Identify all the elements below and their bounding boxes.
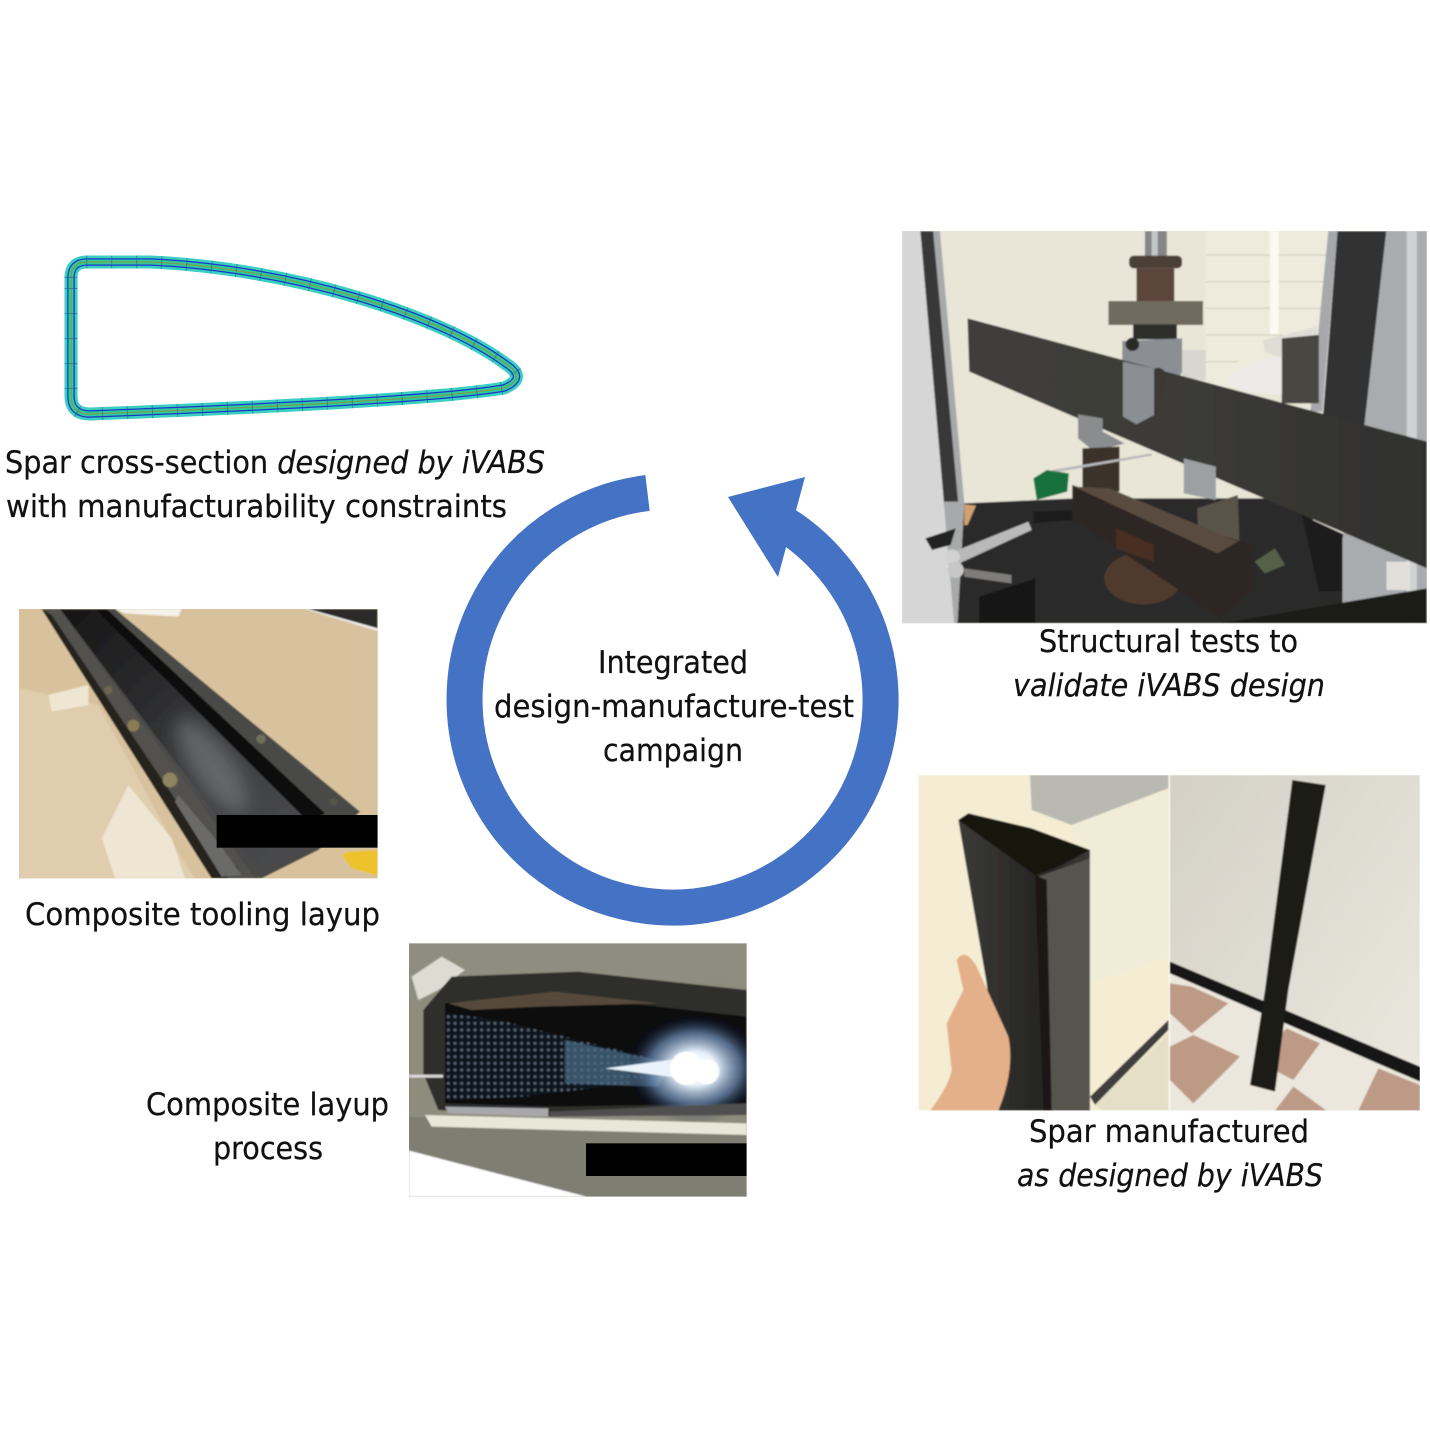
centre label: campaign: Integrated	[598, 645, 748, 681]
caption: structural tests: validate iVABS design	[1013, 668, 1325, 704]
caption: spar cross-section: Spar cross-section designed by iVABS	[5, 445, 545, 481]
caption: spar cross-section	[5, 445, 545, 525]
centre label: campaign: design-manufacture-test	[494, 689, 854, 725]
caption: composite layup process: Composite layup	[146, 1087, 389, 1123]
caption: spar manufactured: Spar manufactured	[1029, 1114, 1309, 1150]
panel: spar cross-section diagram	[71, 262, 517, 414]
centre label: campaign: campaign	[603, 733, 743, 769]
caption: spar manufactured: as designed by iVABS	[1017, 1158, 1323, 1194]
caption: structural tests: Structural tests to	[1039, 624, 1298, 660]
caption: spar manufactured	[1017, 1114, 1323, 1194]
photo: composite tooling layup	[15, 605, 382, 882]
photo: structural test rig	[900, 225, 1430, 625]
blue circular arrow	[465, 477, 881, 907]
photo: composite layup process	[405, 940, 765, 1200]
caption: composite layup process	[146, 1087, 389, 1167]
centre label: campaign	[494, 645, 854, 769]
caption: composite layup process: process	[213, 1131, 323, 1167]
caption: structural tests	[1013, 624, 1325, 704]
caption: spar cross-section: with manufacturability constraints	[6, 489, 507, 525]
caption: composite tooling layup: Composite tooling layup	[25, 897, 380, 933]
photo: spar manufactured	[918, 775, 1420, 1111]
